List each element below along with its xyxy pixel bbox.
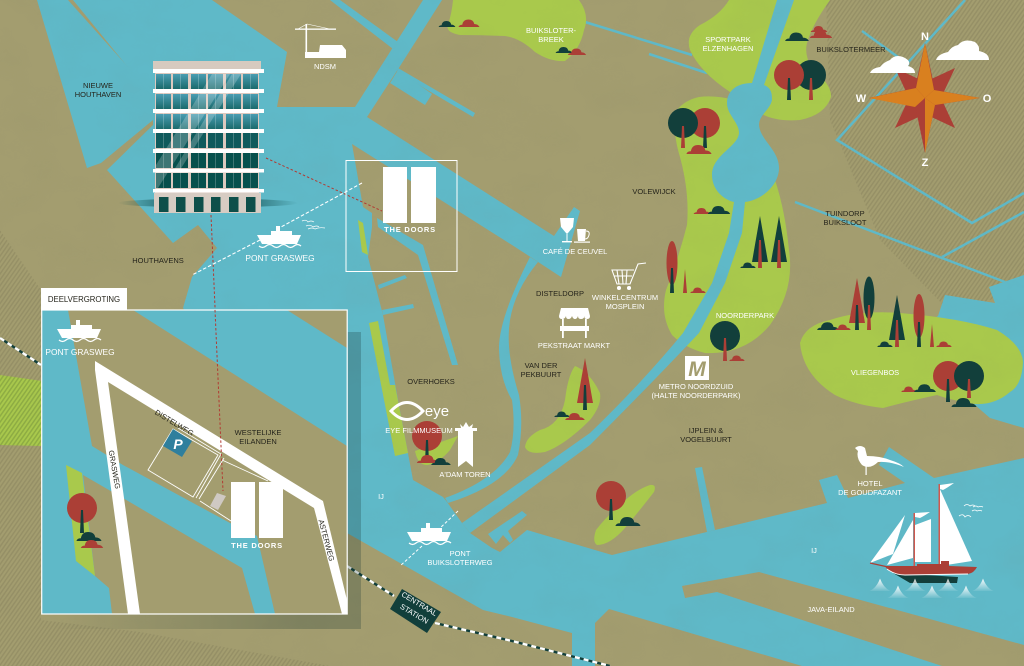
label: Pont Grasweg: PONT GRASWEG <box>245 253 315 263</box>
green strip: Doors coast <box>358 220 368 255</box>
inset panel: deelvergroting <box>41 288 347 614</box>
label: Eye Filmmuseum: EYE FILMMUSEUM <box>385 426 453 435</box>
labels: Nieuwe Houthaven: NIEUWE <box>83 81 113 90</box>
inset tab <box>41 288 127 311</box>
green: Eye <box>415 436 458 465</box>
park: Van der Pekbuurt <box>525 366 600 453</box>
label: Westelijke Eilanden: WESTELIJKE <box>235 428 281 437</box>
label: Van der Pekbuurt <box>521 361 562 379</box>
bushes Van der Pekbuurt <box>554 412 585 420</box>
trees: Elzenhagen pair <box>774 60 826 100</box>
icon: metro <box>685 356 709 381</box>
bushes: Eye <box>417 455 451 465</box>
label: Tuindorp Buiksloot: BUIKSLOOT <box>824 218 867 227</box>
curved canal <box>445 257 538 503</box>
The Doors logo: THE DOORS <box>384 225 436 234</box>
label: Hotel de Goudfazant <box>838 479 902 497</box>
tree IJplein <box>596 481 626 520</box>
green field west <box>0 375 42 446</box>
label: IJplein & Vogelbuurt <box>680 426 732 444</box>
trees Vliegenbos north <box>849 276 934 347</box>
The Doors inset logo: THE DOORS <box>231 541 283 550</box>
compass rose: O <box>983 93 992 105</box>
trees Vliegenbos south <box>933 361 984 402</box>
bush small red south <box>729 356 745 361</box>
compass rose: W <box>856 93 867 105</box>
seagulls <box>302 220 325 229</box>
label: Westelijke Eilanden: EILANDEN <box>239 437 277 446</box>
label: Vliegenbos: VLIEGENBOS <box>851 368 899 377</box>
park: Buiksloterbreek <box>448 0 586 61</box>
green field hatch <box>0 375 42 446</box>
label: IJplein & Vogelbuurt: VOGELBUURT <box>680 435 732 444</box>
label: Disteldorp: DISTELDORP <box>536 289 584 298</box>
poplar trees Noorderpark <box>666 241 687 293</box>
icon: goudfazant bird <box>855 446 904 475</box>
ferry route Grasweg <box>192 183 362 275</box>
label: Westelijke Eilanden <box>235 428 281 446</box>
label: Winkelcentrum Mosplein <box>592 293 658 311</box>
water: upper-left harbour <box>37 0 153 168</box>
lake and canal <box>462 0 794 533</box>
cloud small <box>870 56 915 73</box>
ferry icon Buiksloterweg <box>407 523 451 544</box>
label: A'DAM Toren: A'DAM TOREN <box>439 470 491 479</box>
cloud large <box>936 41 989 60</box>
water: east harbour <box>900 275 1024 428</box>
label: IJ east: IJ <box>811 546 817 555</box>
Eye Filmmuseum logo: eye <box>425 403 449 420</box>
canal IJplein <box>695 467 715 532</box>
hatched area: south-west <box>0 230 330 666</box>
road names: GRASWEG <box>107 449 122 490</box>
The Doors logo <box>383 167 436 234</box>
tree inset <box>67 493 97 533</box>
label: Van der Pekbuurt: PEKBUURT <box>521 370 562 379</box>
bushes: Buiksloterbreek <box>556 47 586 55</box>
glass reflections <box>156 74 241 188</box>
label: Buiksloterbreek: BREEK <box>538 35 564 44</box>
trees: Noorderpark pair <box>668 108 720 148</box>
red leader line to inset <box>211 215 223 491</box>
ground floor doors <box>159 197 256 212</box>
inset drop shadow <box>50 332 361 629</box>
label: Hotel de Goudfazant: HOTEL <box>857 479 883 488</box>
park: Vliegenbos <box>800 312 1023 408</box>
label: Tuindorp Buiksloot <box>824 209 867 227</box>
bush red Noorderpark <box>686 145 712 154</box>
bushes: top-left park <box>439 20 480 27</box>
tree Van der Pekbuurt <box>577 358 593 410</box>
inset map <box>66 310 347 614</box>
The Doors inset logo <box>231 482 283 550</box>
parking plot <box>148 428 268 521</box>
building shadow <box>118 198 298 208</box>
label: Sportpark Elzenhagen <box>703 35 753 53</box>
label: Pekstraat Markt: PEKSTRAAT MARKT <box>538 341 611 350</box>
label: Metro Noordzuid: (HALTE NOORDERPARK) <box>652 391 741 400</box>
label: Metro Noordzuid: METRO NOORDZUID <box>659 382 734 391</box>
parking sign <box>163 429 192 457</box>
mullions <box>163 74 251 188</box>
bushes Vliegenbos south <box>901 384 977 407</box>
inlet near Buiksloterweg <box>488 511 527 544</box>
label: NDSM: NDSM <box>314 62 336 71</box>
icon: metro: M <box>688 358 706 381</box>
hatched area: north-east <box>826 0 1024 312</box>
road names <box>107 408 336 562</box>
label: Winkelcentrum Mosplein: MOSPLEIN <box>606 302 644 311</box>
label: Sportpark Elzenhagen: SPORTPARK <box>705 35 751 44</box>
labels: Nieuwe Houthaven: HOUTHAVEN <box>75 90 121 99</box>
park: Sportpark Elzenhagen <box>689 0 831 120</box>
label: Java-Eiland: JAVA-EILAND <box>807 605 855 614</box>
water: NDSM canals <box>330 0 475 365</box>
bush IJplein <box>615 517 641 526</box>
bush dark Noorderpark <box>740 262 756 268</box>
label: Metro Noordzuid <box>652 382 741 400</box>
compass rose: Z <box>922 157 929 169</box>
red leader line to The Doors <box>266 158 382 211</box>
Centraal station sign: STATION <box>399 602 430 626</box>
bush small red <box>690 288 706 293</box>
bushes mid Noorderpark <box>694 206 730 214</box>
label: Pont Buiksloterweg <box>427 549 493 567</box>
icon: A'DAM toren <box>455 422 477 467</box>
road names: DISTELWEG <box>153 408 195 438</box>
label: Houthavens: HOUTHAVENS <box>132 256 184 265</box>
label: Sportpark Elzenhagen: ELZENHAGEN <box>703 44 753 53</box>
label: Pont Buiksloterweg: BUIKSLOTERWEG <box>427 558 493 567</box>
label: Noorderpark: NOORDERPARK <box>716 311 774 320</box>
office building illustration <box>153 61 264 213</box>
bushes inset <box>76 532 103 548</box>
park: IJplein <box>594 485 655 545</box>
bushes: Elzenhagen <box>785 26 832 41</box>
birds over sea <box>959 504 983 517</box>
label: Van der Pekbuurt: VAN DER <box>525 361 558 370</box>
label: Overhoeks: OVERHOEKS <box>407 377 455 386</box>
icon: shopping cart <box>612 263 646 290</box>
NDSM crane icon <box>295 24 346 58</box>
tree Noorderpark south <box>710 321 740 361</box>
compass rose <box>856 31 992 169</box>
inset tab: DEELVERGROTING <box>48 295 120 304</box>
Centraal station rail line <box>0 338 610 666</box>
ferry icon Grasweg <box>257 226 301 248</box>
label: IJ west: IJ <box>378 492 384 501</box>
inset ferry icon <box>57 320 101 342</box>
label: Volewijck: VOLEWIJCK <box>632 187 676 196</box>
waves <box>870 578 994 598</box>
Centraal station sign <box>390 589 441 633</box>
windows <box>156 74 258 129</box>
label: Pont Buiksloterweg: PONT <box>450 549 471 558</box>
label: Winkelcentrum Mosplein: WINKELCENTRUM <box>592 293 658 302</box>
floor slabs <box>153 69 264 192</box>
label: Buiksloterbreek: BUIKSLOTER- <box>526 26 577 35</box>
parking sign: P <box>173 436 183 452</box>
label: Hotel de Goudfazant: DE GOUDFAZANT <box>838 488 902 497</box>
bushes Vliegenbos north <box>817 322 952 347</box>
inset frame <box>42 310 347 614</box>
label: inset Pont Grasweg: PONT GRASWEG <box>45 347 115 357</box>
label: IJplein & Vogelbuurt: IJPLEIN & <box>689 426 723 435</box>
frame: The Doors location <box>346 160 457 272</box>
green strip: Overhoeks coast <box>369 321 408 456</box>
label: Buiksloterbreek <box>526 26 577 44</box>
sailing ship <box>870 483 977 583</box>
tree: Eye <box>412 421 442 462</box>
compass rose: N <box>921 31 929 43</box>
Centraal station sign: CENTRAAL <box>400 590 439 618</box>
label: Buikslotermeer: BUIKSLOTERMEER <box>816 45 886 54</box>
road names: ASTERWEG <box>317 519 336 562</box>
Eye Filmmuseum logo <box>391 402 449 420</box>
continued leader line in inset <box>215 310 223 491</box>
park: Noorderpark <box>664 96 790 353</box>
icon: market stall <box>559 308 590 338</box>
ferry route Buiksloterweg <box>400 511 458 566</box>
labels: Nieuwe Houthaven <box>75 81 121 99</box>
icon: wine glass and cup <box>560 218 590 243</box>
site rectangle <box>210 493 226 510</box>
label: Cafe de Ceuvel: CAFÉ DE CEUVEL <box>543 247 607 256</box>
thin canals north <box>585 0 1024 282</box>
cone trees Noorderpark <box>752 216 787 268</box>
label: Tuindorp Buiksloot: TUINDORP <box>825 209 865 218</box>
